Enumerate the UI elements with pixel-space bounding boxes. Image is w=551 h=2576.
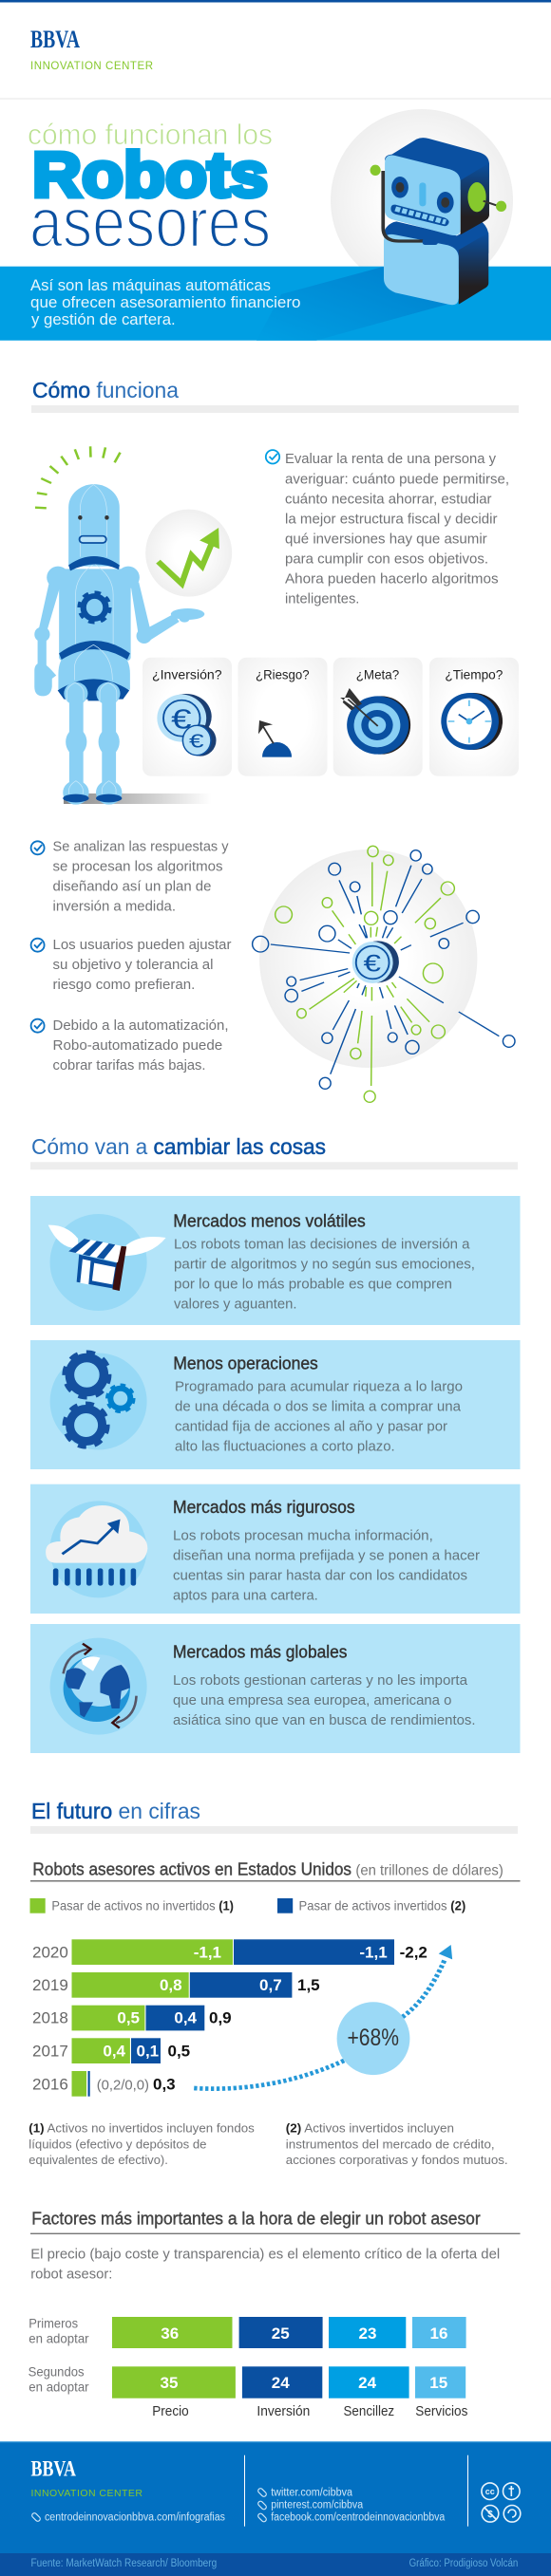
factors intro: El precio (bajo coste y transparencia) es el elemento crítico de la oferta del [30, 2246, 500, 2262]
footer social links: twitter.com/cibbva [271, 2487, 353, 2498]
factors row: segundos: en adoptar [28, 2379, 89, 2394]
innovation center tagline: INNOVATION CENTER [30, 61, 153, 72]
factors row: primeros: en adoptar [28, 2331, 89, 2346]
growth arrow [194, 1945, 452, 2089]
row 2018: 0,4 [174, 2009, 198, 2027]
rays [35, 446, 121, 508]
explanation text: qué inversiones hay que asumir [285, 531, 487, 547]
chart legend: Pasar de activos invertidos (2) [298, 1898, 466, 1913]
panel 1 text: valores y aguanten. [174, 1297, 296, 1313]
row 2019: 0,8 [160, 1976, 182, 1994]
panel 1 title: Mercados menos volátiles [173, 1212, 366, 1231]
intro band [0, 267, 551, 341]
green connectors [276, 846, 454, 1102]
icon: target with dart [340, 688, 410, 755]
head [68, 484, 120, 567]
panel 2 title: Menos operaciones [173, 1354, 318, 1373]
panel 3 text: Los robots procesan mucha información, [173, 1528, 433, 1544]
factors row: segundos: 24 [358, 2374, 377, 2392]
checklist: cobrar tarifas más bajas. [53, 1057, 205, 1073]
chest gear [80, 593, 109, 622]
panel 1 text: partir de algoritmos y no según sus emociones, [174, 1257, 475, 1273]
floor shadow [64, 793, 211, 804]
panel 4 text: Los robots gestionan carteras y no les importa [173, 1672, 468, 1689]
factors row: segundos: 15 [429, 2374, 447, 2392]
panel 1 text [174, 1237, 475, 1313]
factors row: segundos: Segundos [28, 2363, 85, 2379]
card: tiempo: ¿Tiempo? [445, 667, 504, 682]
BBVA wordmark: BBVA [30, 26, 80, 53]
section heading: cómo van a cambiar las cosas [30, 1134, 518, 1169]
icon: gauge [258, 720, 292, 757]
panel 3 text: cuentas sin parar hasta dar con los candidatos [173, 1568, 467, 1584]
icon: euro coins: € [171, 705, 192, 735]
panel: mercados más rigurosos [30, 1484, 521, 1614]
section heading: cómo funciona: Cómo funciona [32, 378, 179, 402]
row 2017 [32, 2038, 190, 2063]
factors categories: Sencillez [344, 2404, 394, 2419]
factors row: primeros: 36 [161, 2324, 179, 2343]
intro text [30, 276, 300, 328]
footer tagline: INNOVATION CENTER [30, 2488, 142, 2499]
explanation text: inteligentes. [285, 590, 359, 607]
row 2020: -1,1 [194, 1943, 221, 1961]
panel 2 text: Programado para acumular riqueza a lo largo [175, 1379, 463, 1395]
footnote 1: (1) Activos no invertidos incluyen fondos [28, 2121, 255, 2136]
checklist: inversión a medida. [53, 899, 176, 915]
icon: gears [50, 1353, 147, 1450]
panel: mercados más globales [30, 1624, 521, 1753]
row 2018: 2018 [32, 2009, 68, 2027]
title [28, 118, 273, 262]
footnote 2: (2) Activos invertidos incluyen [286, 2121, 454, 2136]
row 2020: 2020 [32, 1943, 68, 1961]
panel 4 text [173, 1672, 475, 1728]
factors categories [152, 2404, 467, 2419]
factors row: primeros: Primeros [28, 2316, 78, 2331]
chart legend [30, 1898, 466, 1913]
panel 3 text [173, 1528, 480, 1604]
row 2020: -2,2 [400, 1943, 428, 1961]
row 2017: 0,1 [137, 2043, 159, 2061]
creative commons icons [482, 2483, 521, 2522]
card: riesgo [238, 658, 327, 776]
icon: clock [441, 693, 503, 750]
title line 1: cómo funcionan los [28, 118, 273, 151]
row 2016: 0,3 [153, 2075, 176, 2093]
central euro coin: € [364, 950, 381, 977]
factors heading: Factores más importantes a la hora de elegir un robot asesor [31, 2209, 481, 2228]
growth callout: +68% [348, 2025, 399, 2051]
section heading: el futuro en cifras [30, 1799, 518, 1834]
intro text: y gestión de cartera. [31, 310, 176, 328]
row 2018: 0,9 [209, 2009, 232, 2027]
hero robot [370, 138, 506, 305]
title line 3: asesores [29, 183, 271, 262]
card: meta: ¿Meta? [356, 667, 399, 682]
central euro coin [352, 941, 399, 983]
row 2016: 2016 [32, 2075, 68, 2093]
section heading: cómo van a cambiar las cosas: Cómo van a cambiar las cosas [31, 1134, 326, 1159]
checklist [31, 839, 231, 1073]
intro text: que ofrecen asesoramiento financiero [30, 293, 300, 311]
icon: euro coins [157, 694, 217, 756]
thinking robot illustration [34, 446, 211, 805]
hero background circle [331, 109, 513, 291]
footer logo: BBVA [30, 2456, 76, 2480]
explanation text: Ahora pueden hacerlo algoritmos [285, 570, 499, 587]
card: tiempo [429, 658, 519, 776]
row 2017: 0,5 [167, 2043, 190, 2061]
checklist: su objetivo y tolerancia al [53, 957, 213, 973]
checklist: riesgo como prefieran. [53, 977, 195, 993]
robot headset [383, 171, 424, 241]
creative commons icons: cc [485, 2487, 495, 2496]
checklist: Se analizan las respuestas y [53, 839, 229, 855]
arms [34, 567, 204, 696]
row 2016: (0,2/0,0) [97, 2077, 149, 2093]
panel 4 title: Mercados más globales [173, 1643, 348, 1662]
check icon 1 [31, 841, 45, 854]
blue connectors [253, 850, 515, 1089]
row 2018: 0,5 [117, 2009, 140, 2027]
stacked bar chart [32, 1939, 428, 2097]
footnote 2: acciones corporativas y fondos mutuos. [286, 2153, 508, 2167]
robot head [385, 138, 489, 190]
chart heading: (en trillones de dólares) [355, 1863, 504, 1879]
chart heading: Robots asesores activos en Estados Unidos [32, 1860, 352, 1879]
footnote 2: instrumentos del mercado de crédito, [286, 2137, 495, 2151]
footnote 1: líquidos (efectivo y depósitos de [28, 2137, 206, 2151]
factors categories: Servicios [415, 2404, 467, 2419]
panel: mercados menos volátiles [30, 1196, 521, 1325]
torso [59, 569, 131, 661]
panel 1 text: Los robots toman las decisiones de inversión a [174, 1237, 470, 1253]
credits bar: Fuente: MarketWatch Research/ Bloomberg [30, 2558, 217, 2569]
factors intro: robot asesor: [30, 2266, 112, 2282]
row 2019: 0,7 [259, 1976, 282, 1994]
factors intro [30, 2246, 500, 2282]
chart heading [30, 1860, 521, 1881]
footnote 1 [28, 2121, 255, 2167]
factors row: segundos [28, 2363, 466, 2399]
footnote 1: equivalentes de efectivo). [28, 2153, 168, 2167]
collar [68, 556, 120, 570]
panel 2 text [175, 1379, 463, 1455]
panel 2 text: de una década o dos se limita a comprar una [175, 1399, 462, 1415]
title line 2: Robots [32, 140, 268, 211]
credits bar: Gráfico: Prodigioso Volcán [409, 2558, 518, 2569]
growth callout [337, 2002, 409, 2075]
row 2018 [32, 2006, 232, 2030]
icon: flying store [48, 1214, 166, 1311]
checklist: Debido a la automatización, [53, 1017, 228, 1034]
checklist: diseñando así un plan de [53, 879, 211, 895]
footer social links: facebook.com/centrodeinnovacionbbva [271, 2512, 446, 2524]
panel 4 text: que una empresa sea europea, americana o [173, 1692, 451, 1708]
panel 2 text: alto las fluctuaciones a corto plazo. [175, 1439, 395, 1455]
check icon [266, 450, 279, 463]
card: meta [333, 658, 423, 776]
checklist: Los usuarios pueden ajustar [53, 937, 232, 953]
factors categories: Precio [152, 2404, 189, 2419]
panel: menos operaciones [30, 1340, 521, 1469]
factors categories: Inversión [256, 2404, 310, 2419]
row 2020: -1,1 [359, 1943, 388, 1961]
header logo [30, 26, 153, 72]
panel 4 text: asiática sino que van en busca de rendimientos. [173, 1712, 475, 1728]
card: riesgo: ¿Riesgo? [256, 667, 310, 682]
robot shadow [256, 267, 449, 341]
explanation text: cuánto necesita ahorrar, estudiar [285, 491, 492, 507]
section heading: cómo funciona [31, 378, 519, 413]
row 2017: 0,4 [103, 2043, 126, 2061]
section heading: el futuro en cifras: El futuro en cifras [31, 1799, 200, 1823]
icon: cloud with chart [46, 1501, 147, 1597]
robot body [384, 221, 488, 269]
bubble with growth arrow [145, 510, 232, 597]
factors row: primeros: 25 [272, 2324, 290, 2343]
footnote 2 [286, 2121, 508, 2167]
check icon 2 [31, 939, 45, 952]
intro text: Así son las máquinas automáticas [30, 276, 271, 294]
footer social links: pinterest.com/cibbva [271, 2500, 364, 2511]
footer [0, 2441, 551, 2553]
row 2019: 1,5 [297, 1976, 320, 1994]
checklist: se procesan los algoritmos [53, 859, 222, 875]
panel 1 text: por lo que lo más probable es que compren [174, 1277, 452, 1293]
footer social links [257, 2487, 446, 2524]
row 2019 [32, 1972, 320, 1998]
check icon 3 [31, 1019, 45, 1033]
row 2020 [32, 1939, 428, 1965]
credits bar [0, 2553, 551, 2576]
icon: globe [50, 1638, 147, 1735]
chart legend: Pasar de activos no invertidos (1) [51, 1898, 234, 1913]
footer website: centrodeinnovacionbbva.com/infografias [45, 2512, 225, 2524]
robot ear [467, 182, 486, 212]
factors row: primeros [28, 2316, 466, 2348]
legs [64, 682, 121, 788]
card: inversión: ¿Inversión? [152, 667, 222, 682]
algorithm burst illustration [253, 846, 515, 1102]
icon: euro coins: € [189, 730, 204, 752]
panel 3 text: diseñan una norma prefijada y se ponen a hacer [173, 1548, 480, 1564]
row 2019: 2019 [32, 1976, 68, 1994]
explanation text: la mejor estructura fiscal y decidir [285, 511, 498, 527]
panel 3 title: Mercados más rigurosos [173, 1498, 355, 1517]
explanation text [266, 450, 509, 607]
panel 3 text: aptos para una cartera. [173, 1588, 318, 1604]
explanation text: para cumplir con esos objetivos. [285, 551, 488, 567]
creative commons icons: $ [487, 2510, 493, 2520]
explanation text: Evaluar la renta de una persona y [285, 451, 496, 467]
row 2017: 2017 [32, 2043, 68, 2061]
checklist: Robo-automatizado puede [53, 1037, 222, 1054]
top bar [0, 0, 551, 2]
explanation text: averiguar: cuánto puede permitirse, [285, 471, 509, 487]
hips [58, 644, 130, 690]
feet [63, 780, 89, 805]
row 2016 [32, 2071, 176, 2097]
card: inversión [142, 658, 232, 776]
factors row: segundos: 24 [272, 2374, 290, 2392]
panel 2 text: cantidad fija de acciones al año y pasar por [175, 1419, 447, 1435]
factors row: segundos: 35 [161, 2374, 178, 2392]
factors row: primeros: 16 [430, 2324, 447, 2343]
factors row: primeros: 23 [359, 2324, 376, 2343]
